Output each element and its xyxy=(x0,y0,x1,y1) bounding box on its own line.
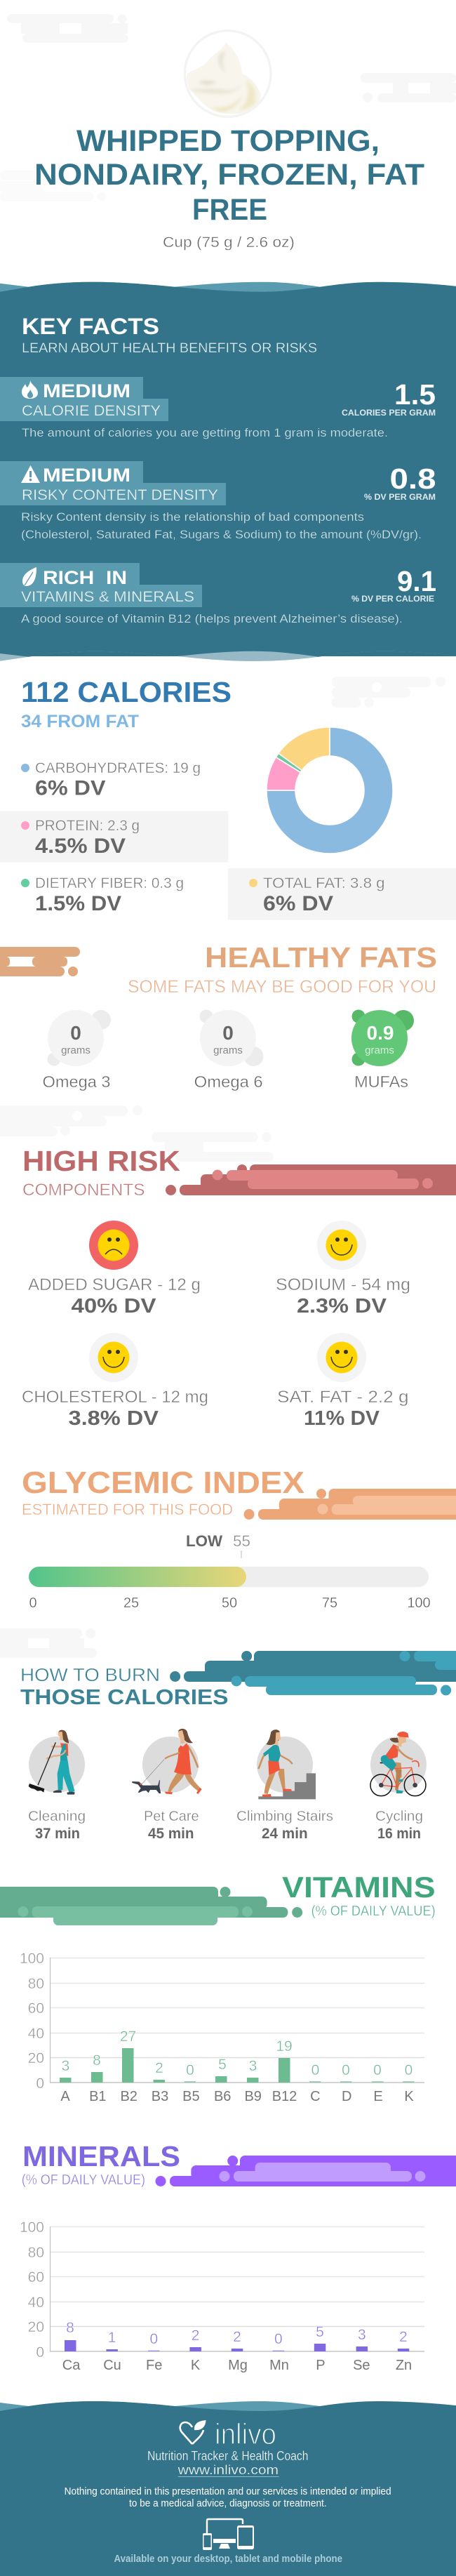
title xyxy=(34,124,424,227)
bar chart: vitamins: 27 xyxy=(120,2029,136,2045)
legend: protein: 4.5% DV xyxy=(35,835,126,858)
bar chart: vitamins: B12 xyxy=(272,2089,297,2104)
heading: key facts: KEY FACTS xyxy=(22,314,159,339)
heading: healthy fats: HEALTHY FATS xyxy=(205,941,437,974)
logo: inlivo xyxy=(180,2417,276,2450)
badge: omega 6: Omega 6 xyxy=(194,1073,263,1091)
fact: vitamins and minerals: RICH IN xyxy=(43,567,127,588)
bar chart: minerals: 80 xyxy=(28,2245,44,2261)
bar chart: vitamins: B9 xyxy=(244,2089,262,2104)
legend: total fat: 6% DV xyxy=(263,892,333,915)
heading: high risk: COMPONENTS xyxy=(22,1181,145,1200)
gauge axis labels: 25 xyxy=(123,1595,139,1611)
heading: calories: 34 FROM FAT xyxy=(21,712,139,731)
bar chart: minerals: 0 xyxy=(274,2331,283,2347)
bar chart: minerals: 0 xyxy=(36,2344,44,2361)
legend: dietary fiber: DIETARY FIBER: 0.3 g xyxy=(35,875,184,891)
badge: MUFAs: 0.9 xyxy=(367,1022,394,1044)
bar chart: vitamins: B1 xyxy=(89,2089,107,2104)
bar chart: vitamins: D xyxy=(342,2089,351,2104)
fact: calorie density: CALORIES PER GRAM xyxy=(342,408,436,418)
disclaimer: to be a medical advice, diagnosis or treatment. xyxy=(129,2497,327,2509)
panel: how to burn those calories xyxy=(20,1651,456,1842)
heading: how to burn: HOW TO BURN xyxy=(20,1664,160,1685)
badge: omega 3: 0 xyxy=(70,1022,81,1044)
heading: key facts xyxy=(22,314,317,356)
donut chart: calories by macronutrient xyxy=(267,727,393,854)
panel: glycemic index xyxy=(22,1466,456,1611)
bar chart: minerals: 60 xyxy=(28,2269,44,2285)
banner: glycemic index xyxy=(244,1489,456,1520)
bar chart: minerals: 0 xyxy=(149,2331,158,2347)
risk item: sodium xyxy=(276,1221,410,1317)
fact: calorie density: The amount of calories you are getting from 1 gram is moderate. xyxy=(22,426,388,439)
activity: cleaning: Cleaning xyxy=(28,1809,86,1824)
logo: inlivo: inlivo xyxy=(215,2417,276,2450)
bar chart: vitamins: 80 xyxy=(28,1976,44,1992)
fact: vitamins and minerals: VITAMINS & MINERALS xyxy=(21,589,194,605)
activity: climbing stairs: Climbing Stairs xyxy=(236,1809,333,1824)
heading: how to burn: THOSE CALORIES xyxy=(20,1685,229,1709)
legend: carbohydrates xyxy=(21,760,201,800)
risk item: cholesterol: CHOLESTEROL - 12 mg xyxy=(22,1388,208,1407)
panel: minerals xyxy=(20,2140,456,2373)
fact: vitamins and minerals: 9.1 xyxy=(397,565,436,597)
fact: risky content density: MEDIUM xyxy=(43,465,130,486)
risk item: saturated fat xyxy=(277,1333,408,1430)
icon: woman walking dog xyxy=(132,1729,202,1794)
panel: vitamins xyxy=(0,1871,436,2104)
fact: vitamins and minerals xyxy=(0,563,436,625)
banner: high risk xyxy=(166,1164,456,1195)
panel: footer xyxy=(0,2401,456,2576)
gauge axis labels: 50 xyxy=(222,1595,237,1611)
title: WHIPPED TOPPING, xyxy=(76,124,380,158)
bar chart: minerals: 1 xyxy=(108,2330,116,2346)
gauge value: low 55: 55 xyxy=(233,1532,250,1550)
heading: minerals: (% OF DAILY VALUE) xyxy=(22,2172,145,2188)
activity: cleaning: 37 min xyxy=(35,1826,80,1842)
bar chart: vitamins: 40 xyxy=(28,2026,44,2042)
activity: climbing stairs xyxy=(236,1729,333,1842)
heading: high risk: HIGH RISK xyxy=(22,1145,180,1177)
fact: risky content density: Risky Content density is the relationship of bad components xyxy=(21,510,364,524)
icon: flame xyxy=(22,380,38,399)
bar chart: minerals: K xyxy=(191,2358,201,2373)
bar chart: vitamins: B2 xyxy=(120,2089,138,2104)
heading: glycemic index: ESTIMATED FOR THIS FOOD xyxy=(22,1501,233,1518)
gauge axis labels: 100 xyxy=(407,1595,431,1611)
bar chart: minerals: 8 xyxy=(66,2320,74,2336)
legend: carbohydrates: 6% DV xyxy=(35,776,105,800)
heading: glycemic index xyxy=(22,1466,304,1518)
tagline and website xyxy=(147,2449,309,2477)
bar chart: vitamins: 3 xyxy=(249,2058,257,2074)
heading: calories xyxy=(21,676,232,731)
bar chart: vitamins: 0 xyxy=(373,2062,382,2078)
legend: total fat: TOTAL FAT: 3.8 g xyxy=(263,875,384,891)
activity: pet care xyxy=(132,1729,202,1842)
risk item: cholesterol: 3.8% DV xyxy=(69,1407,159,1430)
fact: calorie density: 1.5 xyxy=(394,378,436,411)
bar chart: vitamins: 0 xyxy=(405,2062,413,2078)
heading: glycemic index: GLYCEMIC INDEX xyxy=(22,1466,304,1500)
activity: climbing stairs: 24 min xyxy=(262,1826,308,1842)
fact: calorie density: CALORIE DENSITY xyxy=(22,403,161,419)
bar chart: vitamins: 2 xyxy=(155,2060,163,2076)
bar chart: minerals: P xyxy=(316,2358,326,2373)
bar chart: vitamins: 0 xyxy=(36,2076,44,2092)
icon: warning triangle xyxy=(21,465,40,483)
bar chart: vitamins: 5 xyxy=(218,2057,227,2073)
gauge value: low 55: LOW xyxy=(186,1532,222,1550)
icon: woman climbing stairs xyxy=(257,1729,316,1799)
bar chart: vitamins: B3 xyxy=(152,2089,168,2104)
badge: omega 6: grams xyxy=(213,1044,243,1056)
bar chart: vitamins: A xyxy=(60,2089,70,2104)
disclaimer xyxy=(65,2485,391,2509)
icon: devices xyxy=(203,2519,254,2550)
bar chart: minerals: Ca xyxy=(62,2358,81,2373)
heading: healthy fats: SOME FATS MAY BE GOOD FOR YOU xyxy=(128,977,436,997)
bar chart: vitamins: 100 xyxy=(20,1951,44,1967)
bar chart: vitamins: 0 xyxy=(186,2062,194,2078)
heading: minerals: MINERALS xyxy=(22,2140,180,2172)
bar chart: vitamins: B6 xyxy=(214,2089,231,2104)
bar chart: vitamins: 3 xyxy=(62,2058,69,2074)
food photo: whipped topping xyxy=(185,31,271,117)
legend: carbohydrates: CARBOHYDRATES: 19 g xyxy=(35,760,201,776)
macronutrient bands xyxy=(0,811,456,919)
bar chart: minerals: Fe xyxy=(146,2358,162,2373)
legend: total fat xyxy=(249,875,384,915)
badge: omega 3: Omega 3 xyxy=(42,1073,111,1091)
badge: omega 6 xyxy=(194,1009,264,1091)
icon: leaf xyxy=(22,567,36,586)
bar chart: minerals: Cu xyxy=(103,2358,121,2373)
heading: vitamins: (% OF DAILY VALUE) xyxy=(311,1904,436,1919)
gauge axis labels: 75 xyxy=(322,1595,337,1611)
fact: risky content density: (Cholesterol, Saturated Fat, Sugars & Sodium) to the amount (%DV/gr). xyxy=(21,528,422,541)
title: FREE xyxy=(192,193,267,227)
heading banner: healthy fats xyxy=(0,947,80,976)
bar chart: minerals: 5 xyxy=(316,2324,324,2340)
banner: minerals xyxy=(156,2156,456,2186)
bar chart: minerals: Mn xyxy=(269,2358,289,2373)
fact: vitamins and minerals: % DV PER CALORIE xyxy=(351,594,434,604)
banner: vitamins xyxy=(0,1887,302,1925)
bar chart: vitamins: C xyxy=(310,2089,321,2104)
heading: vitamins xyxy=(282,1871,436,1919)
panel: healthy fats xyxy=(0,941,437,1091)
legend: dietary fiber xyxy=(21,875,184,915)
activity: cleaning xyxy=(28,1730,86,1842)
legend: dietary fiber: 1.5% DV xyxy=(35,892,121,915)
risk item: sodium: SODIUM - 54 mg xyxy=(276,1275,410,1294)
fact: risky content density xyxy=(0,461,436,541)
bar chart: vitamins: 60 xyxy=(28,2000,44,2017)
risk item: cholesterol xyxy=(22,1333,208,1430)
risk item: saturated fat: 11% DV xyxy=(304,1407,380,1430)
bar chart: minerals: 20 xyxy=(28,2319,44,2335)
risk item: added sugar: ADDED SUGAR - 12 g xyxy=(28,1275,201,1294)
badge: MUFAs: MUFAs xyxy=(354,1073,408,1091)
panel: high risk components xyxy=(22,1145,456,1430)
badge: omega 3: grams xyxy=(61,1044,90,1056)
bar chart: minerals: 2 xyxy=(233,2329,241,2345)
legend: protein xyxy=(21,818,140,858)
bar chart: vitamins: 20 xyxy=(28,2050,44,2066)
bar chart: minerals: Se xyxy=(353,2358,370,2373)
risk item: saturated fat: SAT. FAT - 2.2 g xyxy=(277,1388,408,1407)
serving size: Cup (75 g / 2.6 oz) xyxy=(163,234,295,251)
activity: cycling: 16 min xyxy=(377,1826,421,1842)
gauge axis labels xyxy=(29,1595,431,1611)
fact: calorie density: MEDIUM xyxy=(43,380,130,401)
icon: woman on bicycle xyxy=(370,1732,427,1796)
risk item: added sugar xyxy=(28,1221,201,1317)
gauge axis labels: 0 xyxy=(29,1595,37,1611)
bar chart: minerals: 2 xyxy=(399,2329,408,2345)
icon: woman sweeping xyxy=(29,1730,85,1795)
activity: cycling xyxy=(370,1732,427,1842)
bar chart: minerals: 3 xyxy=(358,2327,366,2343)
bar chart: minerals: 2 xyxy=(192,2328,199,2344)
heading: how to burn xyxy=(20,1664,229,1709)
fact: risky content density: % DV PER GRAM xyxy=(364,492,436,502)
badge: MUFAs: grams xyxy=(365,1044,394,1056)
bar chart: vitamins: B5 xyxy=(182,2089,200,2104)
bar chart: vitamins: 19 xyxy=(276,2038,293,2054)
fact: risky content density: RISKY CONTENT DENSITY xyxy=(22,487,218,503)
heading: high risk xyxy=(22,1145,180,1200)
legend: protein: PROTEIN: 2.3 g xyxy=(35,818,140,834)
fact: vitamins and minerals: A good source of Vitamin B12 (helps prevent Alzheimer’s disease). xyxy=(21,612,403,625)
bar chart: minerals xyxy=(20,2219,424,2373)
heading: calories: 112 CALORIES xyxy=(21,676,232,708)
gauge bar xyxy=(29,1567,429,1587)
activity: cycling: Cycling xyxy=(375,1809,423,1824)
badge: MUFAs xyxy=(351,1009,414,1091)
heading: healthy fats xyxy=(128,941,437,997)
tagline and website: Nutrition Tracker & Health Coach xyxy=(147,2449,309,2463)
risk item: added sugar: 40% DV xyxy=(72,1295,156,1317)
bar chart: minerals: 100 xyxy=(20,2219,44,2236)
activity: pet care: 45 min xyxy=(148,1826,194,1842)
bar chart: vitamins: 8 xyxy=(93,2052,101,2069)
fact: calorie density xyxy=(0,377,436,439)
tagline and website: www.inlivo.com xyxy=(177,2463,279,2477)
bar chart: vitamins: K xyxy=(404,2089,414,2104)
bar chart: vitamins xyxy=(20,1951,424,2104)
heading: minerals xyxy=(22,2140,180,2188)
activity: pet care: Pet Care xyxy=(144,1809,199,1824)
bar chart: minerals: Mg xyxy=(228,2358,248,2373)
title: NONDAIRY, FROZEN, FAT xyxy=(34,158,424,192)
bar chart: vitamins: 0 xyxy=(342,2062,350,2078)
bar chart: vitamins: E xyxy=(373,2089,383,2104)
gauge value: low 55 xyxy=(186,1532,250,1558)
fact: risky content density: 0.8 xyxy=(390,463,436,495)
badge: omega 3 xyxy=(42,1010,111,1091)
risk item: sodium: 2.3% DV xyxy=(297,1295,387,1317)
heading: vitamins: VITAMINS xyxy=(282,1871,436,1904)
availability note: Available on your desktop, tablet and mobile phone xyxy=(114,2553,342,2565)
bar chart: minerals: Zn xyxy=(396,2358,412,2373)
disclaimer: Nothing contained in this presentation and our services is intended or implied xyxy=(65,2485,391,2497)
panel: key facts xyxy=(0,282,456,661)
bar chart: minerals: 40 xyxy=(28,2295,44,2311)
bar chart: vitamins: 0 xyxy=(311,2062,319,2078)
heading: key facts: LEARN ABOUT HEALTH BENEFITS OR RISKS xyxy=(22,341,317,356)
banner: burn calories xyxy=(170,1651,456,1696)
badge: omega 6: 0 xyxy=(222,1022,234,1044)
